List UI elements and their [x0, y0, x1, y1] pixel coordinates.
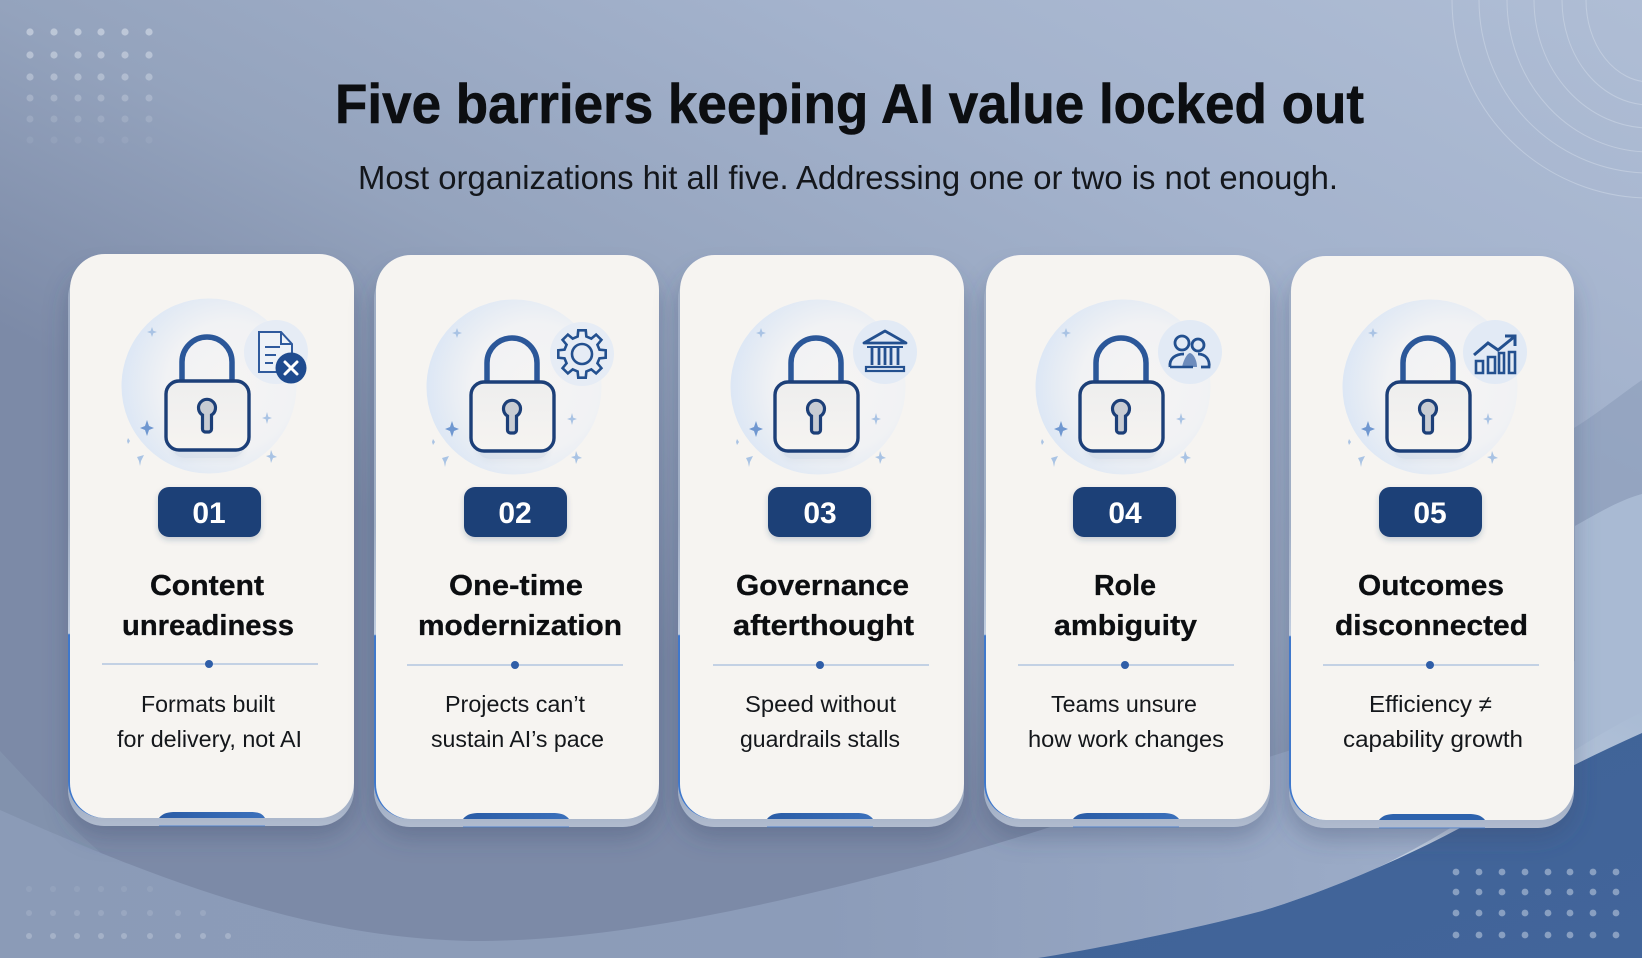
number badge: 01 — [192, 497, 226, 530]
card description: Projects can’t — [445, 691, 585, 717]
panel: card 03 governance afterthought — [678, 255, 964, 827]
card description: Speed without — [745, 691, 896, 717]
card description: sustain AI’s pace — [431, 726, 604, 752]
dot grid: bottom left — [26, 886, 231, 939]
dot grid: bottom right — [1453, 869, 1619, 938]
number badge — [1073, 487, 1176, 537]
dot grid: top left — [26, 28, 153, 143]
card heading — [1054, 570, 1197, 642]
panel: card 04 role ambiguity — [984, 255, 1270, 827]
number badge — [464, 487, 567, 537]
card heading: modernization — [418, 610, 622, 642]
card description: Teams unsure — [1051, 691, 1197, 717]
icon: people — [1158, 320, 1222, 384]
number badge: 02 — [498, 497, 532, 530]
icon: document with x — [244, 320, 308, 384]
panel: card 05 outcomes disconnected — [1289, 256, 1574, 828]
card description — [117, 691, 302, 752]
card description: Formats built — [141, 691, 275, 717]
icon: institution building — [853, 320, 917, 384]
panel: card 01 content unreadiness — [68, 254, 354, 826]
subtitle: Most organizations hit all five. Addressing one or two is not enough. — [358, 159, 1338, 196]
card description: capability growth — [1343, 726, 1523, 752]
card description — [1343, 691, 1523, 752]
number badge: 04 — [1108, 497, 1142, 530]
card description: guardrails stalls — [740, 726, 900, 752]
card heading: afterthought — [733, 610, 914, 642]
number badge — [1379, 487, 1482, 537]
card heading — [733, 570, 914, 642]
card heading: unreadiness — [122, 610, 294, 642]
card heading: Governance — [736, 570, 909, 602]
card heading: Outcomes — [1358, 570, 1504, 602]
card description — [740, 691, 900, 752]
number badge: 05 — [1413, 497, 1447, 530]
panel: card 02 one-time modernization — [374, 255, 659, 827]
card description: Efficiency ≠ — [1369, 691, 1492, 717]
number badge: 03 — [803, 497, 837, 530]
card heading — [418, 570, 622, 642]
card heading — [1335, 570, 1528, 642]
card heading: disconnected — [1335, 610, 1528, 642]
card description: for delivery, not AI — [117, 726, 302, 752]
number badge — [768, 487, 871, 537]
card heading: One-time — [449, 570, 583, 602]
concentric rings: top right — [1452, 0, 1642, 198]
number badge — [158, 487, 261, 537]
card description: how work changes — [1028, 726, 1224, 752]
card heading — [122, 570, 294, 642]
title: Five barriers keeping AI value locked out — [335, 72, 1364, 135]
card heading: Role — [1094, 570, 1156, 602]
icon: growth chart — [1463, 320, 1527, 384]
card heading: ambiguity — [1054, 610, 1197, 642]
card description — [1028, 691, 1224, 752]
card description — [431, 691, 604, 752]
icon: gear — [550, 322, 614, 386]
card heading: Content — [150, 570, 264, 602]
